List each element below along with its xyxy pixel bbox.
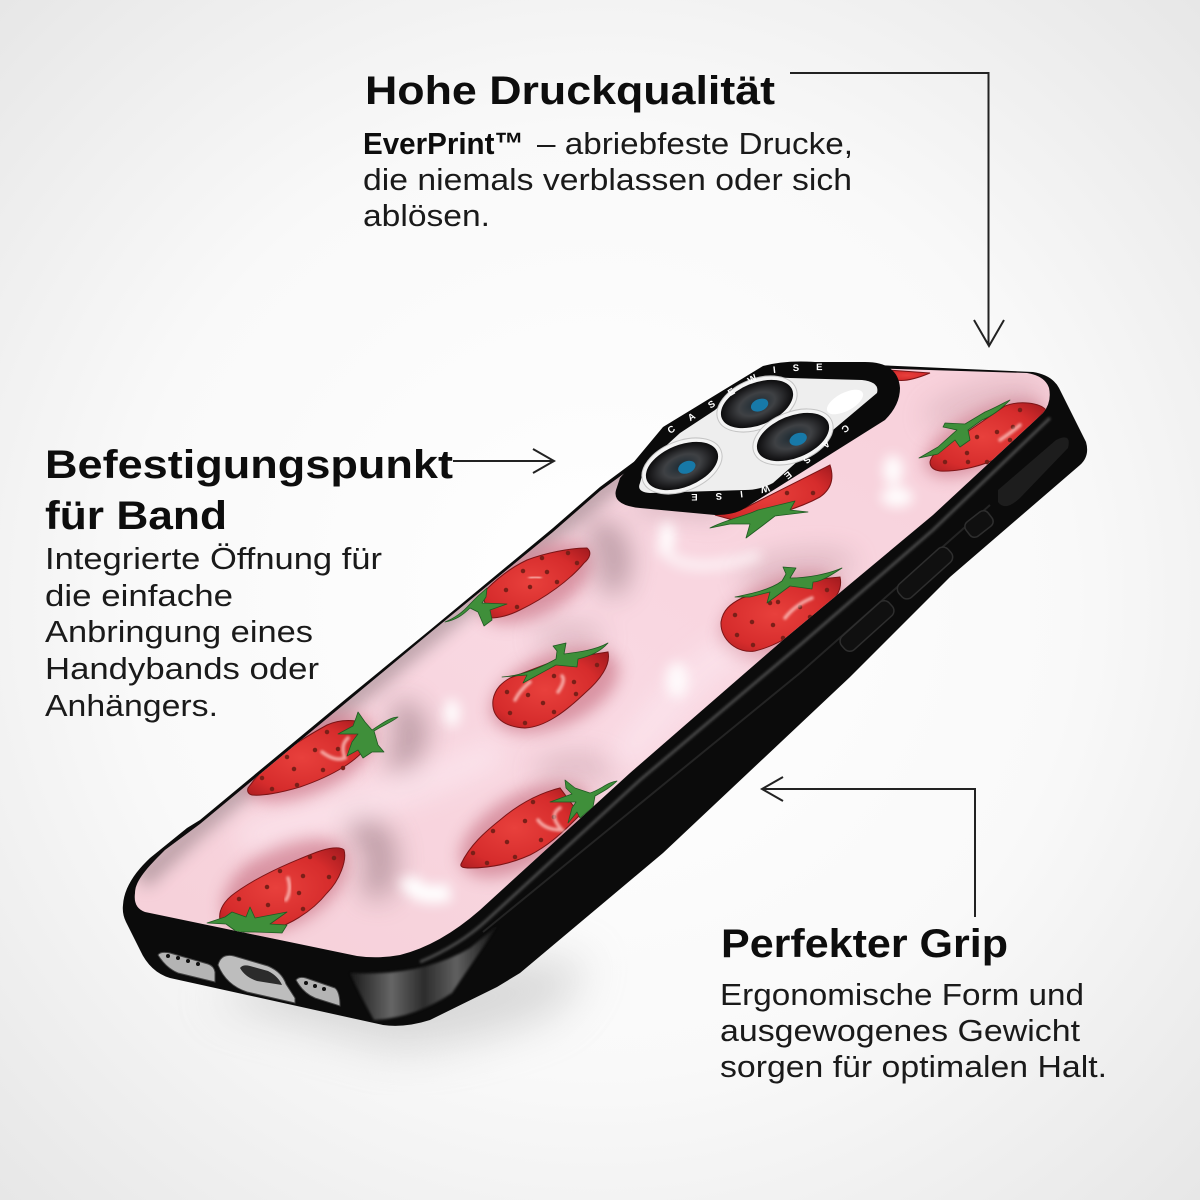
text block: Ergonomische Form: sorgen für optimalen Halt. [720,1049,1107,1084]
text block: Integrierte Öffnung: Anhängers. [45,688,218,723]
text block: Integrierte Öffnung: Handybands oder [45,651,319,686]
strawberry lower middle [461,780,617,868]
strawberry upper left [445,548,590,626]
side buttons [837,508,996,654]
lens top [709,365,805,443]
strawberry upper right [919,400,1046,471]
speaker left [158,952,215,982]
text block: Integrierte Öffnung: Anbringung eines [45,614,313,649]
case body [123,363,1087,1026]
text block: EverPrint: die niemals verblassen oder sich [363,162,852,197]
glossy highlights [408,455,913,894]
text block: Ergonomische Form: Ergonomische Form und [720,977,1084,1012]
strawberry left [248,712,398,795]
strawberry bottom [207,848,345,933]
text block: EverPrint: – abriebfeste Drucke, [537,126,853,161]
heading: Befestigungspunkt für Band: Befestigungspunkt [45,443,453,487]
strawberry middle right [721,567,842,651]
heading: Befestigungspunkt für Band: für Band [45,494,227,538]
back panel pink [135,366,1050,957]
edge shading [140,462,640,880]
arrow: strap attachment [453,449,554,473]
heading: Perfekter Grip: Perfekter Grip [721,922,1008,966]
bumper wordmark: CASEWISE [668,364,822,433]
glass highlight [823,385,867,419]
lens left [634,427,730,505]
pale bands [240,750,500,840]
speaker right [296,977,340,1006]
lens right [745,398,841,476]
arrow: grip [762,777,975,917]
dimple shadows [350,393,1040,895]
bottom ports [158,952,340,1006]
heading: Hohe Druckqualität: Hohe Druckqualität [365,69,775,113]
phone case [123,363,1087,1026]
strawberry centre [493,643,608,728]
strawberry under camera [710,465,832,538]
text block: EverPrint [363,126,853,233]
text block: Ergonomische Form: ausgewogenes Gewicht [720,1013,1080,1048]
phone drop shadow [210,960,590,1050]
heading: Befestigungspunkt für Band [45,443,453,538]
bumper wordmark lower: CASEWISE [692,425,849,500]
pink surface relief [140,370,1057,954]
text block: Integrierte Öffnung: Integrierte Öffnung für [45,541,382,576]
camera bumper [616,362,900,515]
text block: Ergonomische Form [720,977,1107,1084]
mute switch panel [998,437,1069,506]
side face line [483,505,990,932]
text block: Integrierte Öffnung: die einfache [45,578,233,613]
usb port [218,955,295,1003]
dimple halos [206,383,1057,954]
camera island [616,362,900,515]
rim highlight line [420,418,1050,962]
text block: EverPrint: ablösen. [363,198,490,233]
camera glass [639,378,877,493]
glossy bottom corner [350,925,498,1020]
text block: EverPrint: EverPrint™ [363,126,524,161]
text block: Integrierte Öffnung [45,541,382,723]
arrow: print quality [790,73,1004,346]
strawberry top edge [888,370,930,381]
